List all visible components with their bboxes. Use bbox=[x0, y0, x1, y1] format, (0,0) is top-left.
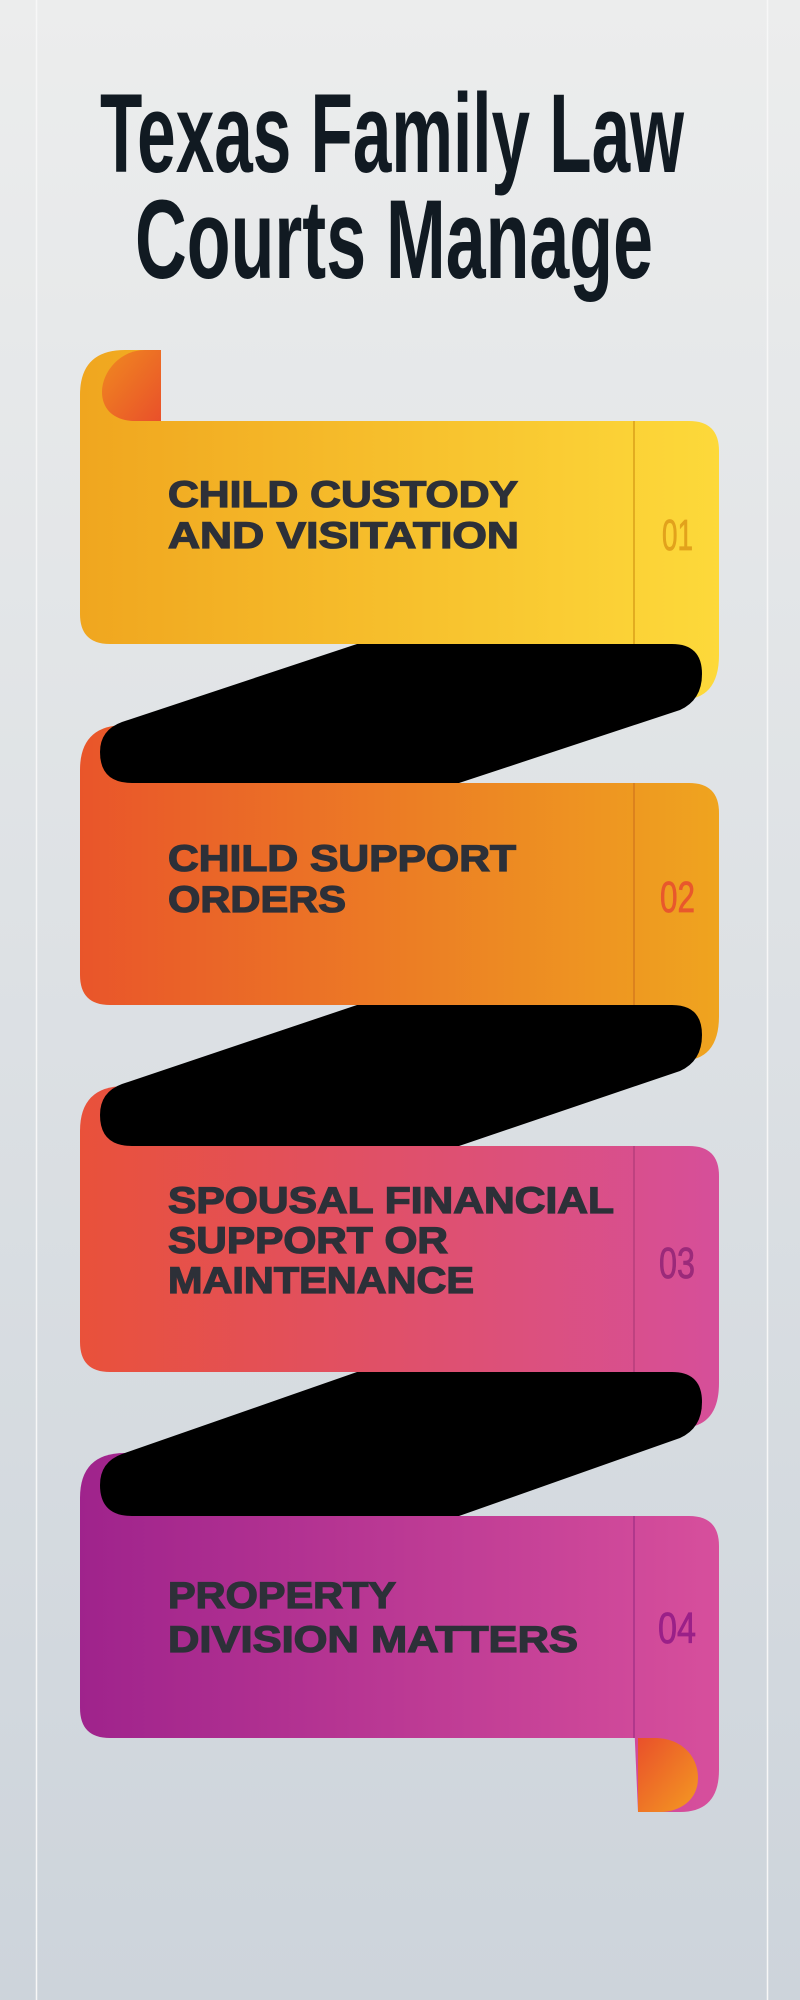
black band 1 bbox=[100, 644, 702, 783]
panel 3: spousal support: SPOUSAL FINANCIAL bbox=[168, 1180, 614, 1221]
icon: top curl bbox=[80, 350, 161, 430]
panel 3: spousal support: MAINTENANCE bbox=[168, 1260, 474, 1301]
black band 3 bbox=[100, 1372, 702, 1516]
icon: bottom curl bbox=[634, 1720, 719, 1812]
black band 2 bbox=[100, 1005, 702, 1146]
panel 4: property division: 04 bbox=[658, 1604, 696, 1653]
panel 4: property division: PROPERTY bbox=[168, 1575, 396, 1616]
panel 2: child support: CHILD SUPPORT bbox=[168, 838, 516, 879]
panel 3: spousal support: 03 bbox=[659, 1239, 695, 1288]
panel 1: child custody: CHILD CUSTODY bbox=[168, 474, 518, 515]
ribbon extensions bbox=[80, 460, 719, 1530]
panel 3: spousal support: SUPPORT OR bbox=[168, 1220, 448, 1261]
panel 4: property division bbox=[80, 1516, 719, 1738]
panel 4: property division: DIVISION MATTERS bbox=[168, 1619, 578, 1660]
panel 1: child custody bbox=[80, 421, 719, 700]
panel 2: child support bbox=[80, 783, 719, 1061]
panel 1: child custody: 01 bbox=[662, 511, 693, 560]
title bbox=[100, 71, 685, 302]
panel 3: spousal support bbox=[80, 1146, 719, 1428]
panel 2: child support: ORDERS bbox=[168, 879, 346, 920]
panel 2: child support: 02 bbox=[660, 873, 695, 922]
panel 1: child custody: AND VISITATION bbox=[168, 515, 519, 556]
